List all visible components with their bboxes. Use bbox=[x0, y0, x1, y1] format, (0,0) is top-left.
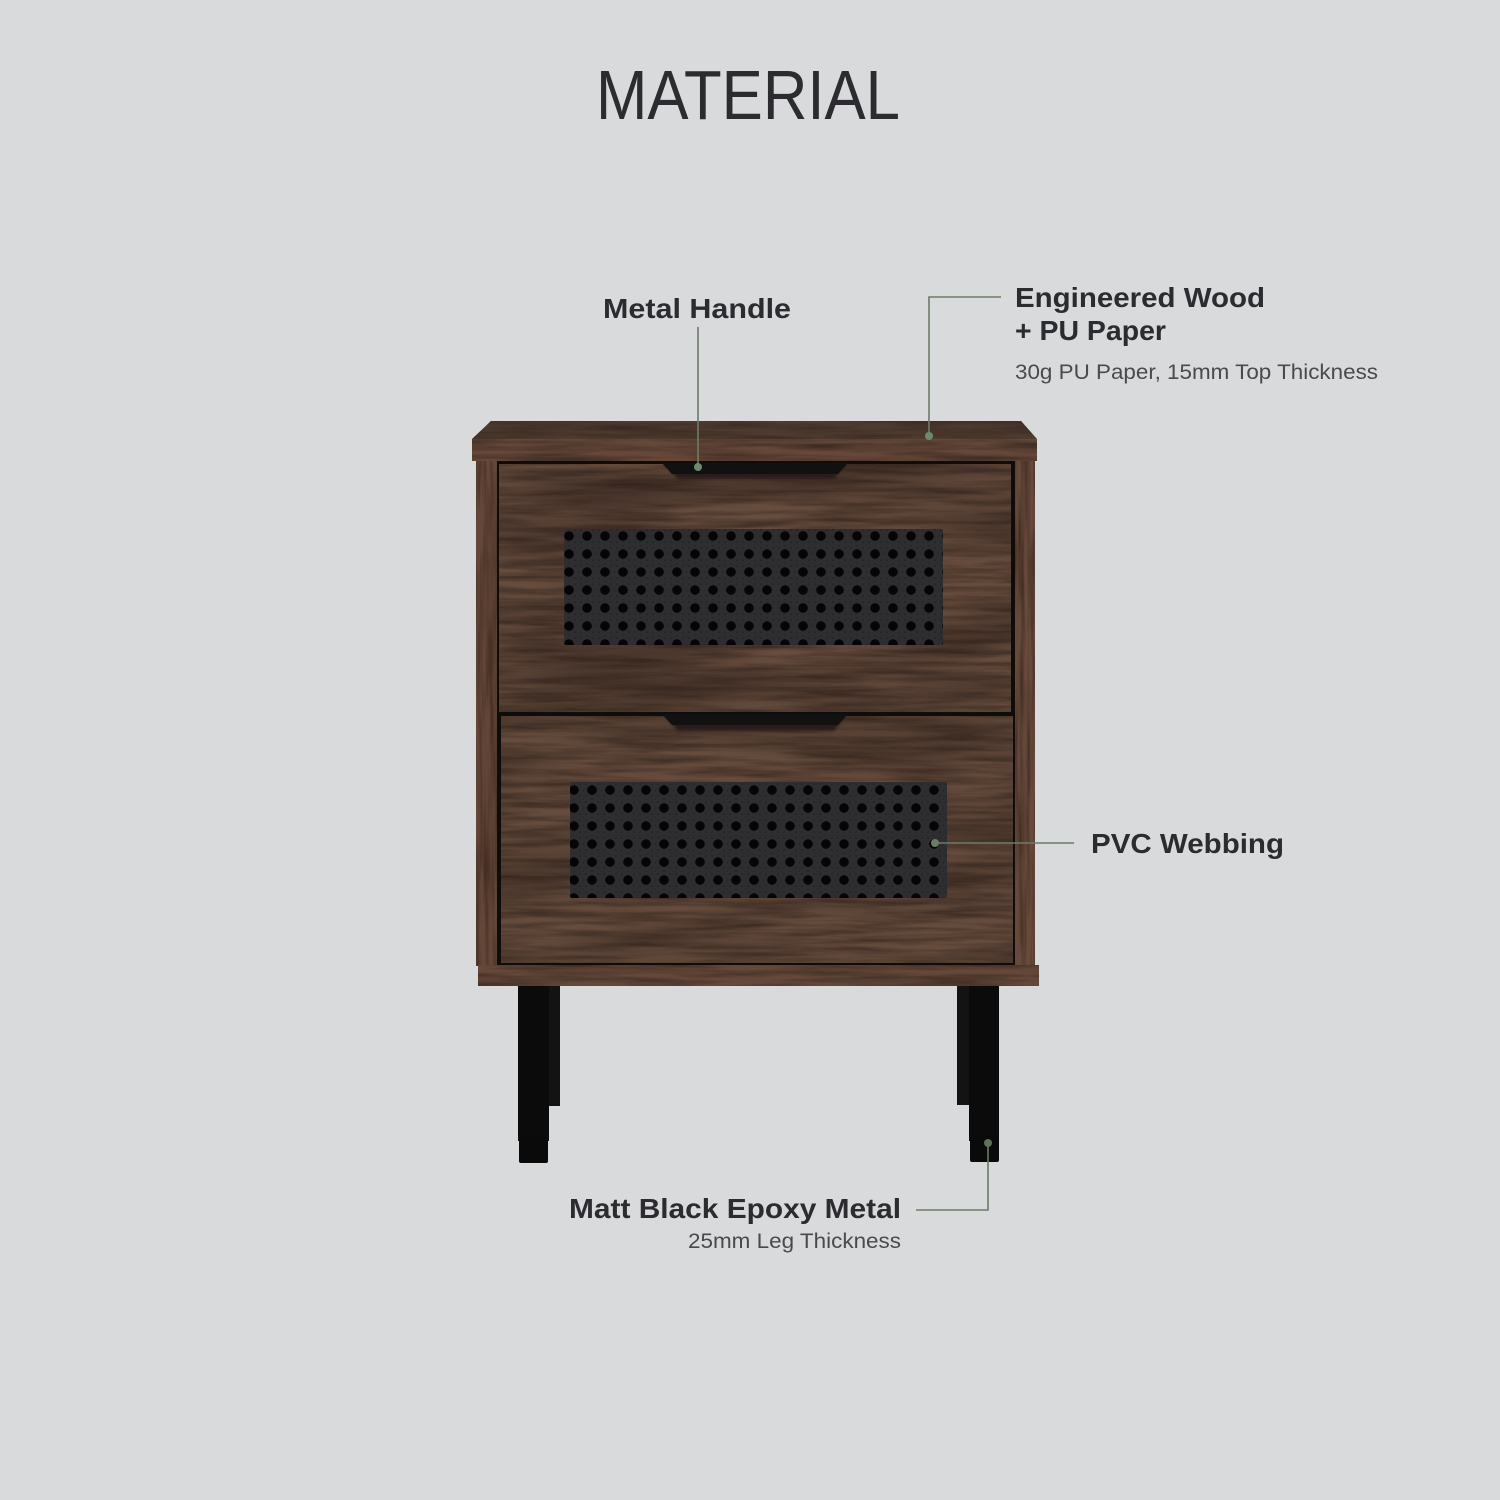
callout: pvc webbing: PVC Webbing bbox=[1091, 828, 1284, 859]
callout: engineered wood: 30g PU Paper, 15mm Top Thickness bbox=[1015, 361, 1378, 384]
callout: metal handle: Metal Handle bbox=[603, 293, 791, 324]
upper drawer front bbox=[499, 464, 1011, 712]
upper drawer bbox=[499, 463, 1011, 712]
back left leg bbox=[547, 986, 560, 1106]
callout: matt black epoxy metal: 25mm Leg Thickness bbox=[688, 1230, 901, 1253]
title: MATERIAL bbox=[596, 56, 900, 134]
callout: engineered wood bbox=[925, 282, 1378, 440]
upper cane panel bbox=[564, 529, 943, 645]
cabinet base bbox=[478, 965, 1039, 986]
lower drawer front bbox=[501, 716, 1013, 963]
front right leg bbox=[969, 986, 999, 1162]
nightstand illustration bbox=[472, 421, 1039, 1163]
callout: engineered wood: + PU Paper bbox=[1015, 315, 1166, 346]
callout: metal handle bbox=[603, 293, 791, 471]
lower handle bbox=[662, 714, 848, 731]
cabinet interior shadow bbox=[497, 461, 1015, 966]
upper handle bbox=[662, 463, 848, 479]
lower drawer bbox=[501, 714, 1013, 963]
cabinet top bbox=[472, 421, 1037, 461]
lower cane panel bbox=[570, 782, 947, 898]
callout: matt black epoxy metal bbox=[569, 1139, 992, 1253]
callout: matt black epoxy metal: Matt Black Epoxy Metal bbox=[569, 1193, 901, 1224]
callout: pvc webbing bbox=[931, 828, 1284, 859]
callout: engineered wood: Engineered Wood bbox=[1015, 282, 1265, 313]
back right leg bbox=[957, 986, 970, 1105]
front left leg bbox=[518, 986, 549, 1163]
right side panel bbox=[1015, 461, 1035, 966]
left side panel bbox=[476, 461, 497, 966]
